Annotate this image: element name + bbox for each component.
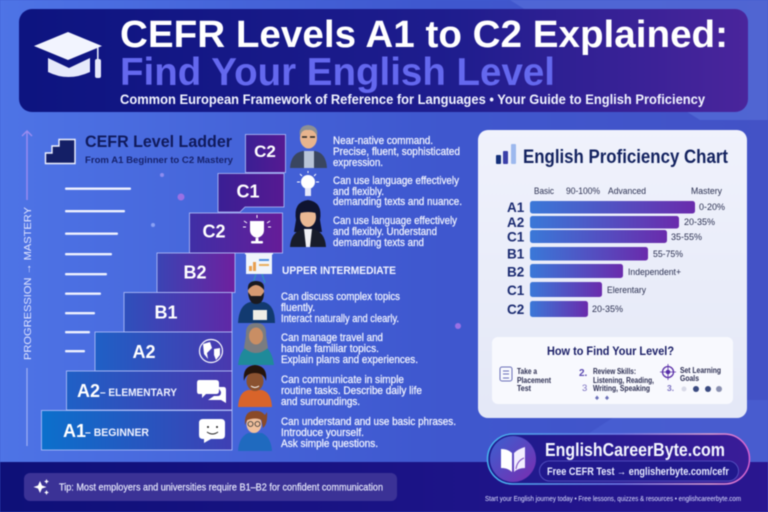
description: B2: fluently. — [281, 302, 315, 314]
ladder heading: CEFR Level Ladder — [85, 132, 232, 151]
icon: globe — [200, 340, 222, 362]
bar chart: C1 — [507, 283, 525, 298]
icon: sparkles — [34, 479, 49, 495]
icon: target — [660, 364, 676, 380]
description: C1: Can use language effectively — [333, 175, 459, 187]
icon: open book with leaf — [490, 436, 536, 482]
description: A2: routine tasks. Describe daily life — [281, 385, 422, 397]
callout: tip: Tip: Most employers and universities require B1–B2 for confident communication — [59, 482, 383, 494]
description: A1: Can understand and use basic phrases. — [281, 416, 456, 428]
title: CEFR Levels A1 to C2 Explained: — [120, 14, 728, 56]
icon: bar chart — [496, 144, 516, 164]
description: C2 second: and flexibly. Understand — [333, 226, 437, 238]
description: A1: Ask simple questions. — [281, 438, 378, 450]
step: B1 — [124, 292, 232, 332]
step: A2: A2 — [132, 342, 156, 362]
tagline: Common European Framework of Reference for Languages • Your Guide to English Proficiency — [120, 92, 705, 107]
bar chart: 35-55% — [671, 232, 703, 243]
description: C2: expression. — [333, 157, 383, 169]
description: C2 — [333, 135, 460, 169]
step 3 text: 3. — [667, 383, 674, 393]
step 2 text: Review Skills: — [593, 367, 636, 376]
progression axis — [22, 131, 34, 446]
icon: presentation board — [245, 253, 273, 283]
description: A2: and surroundings. — [281, 396, 360, 408]
step: A1 beginner — [42, 410, 232, 450]
step: C2 top — [246, 134, 286, 172]
description: C1: demanding texts and nuance. — [333, 196, 462, 208]
step: B1: B1 — [154, 302, 178, 322]
step: A2 elementary — [66, 371, 232, 410]
step 1 text: Take a — [517, 367, 537, 376]
step 2 text — [579, 367, 654, 400]
subtitle heading: Find Your English Level — [120, 51, 555, 94]
avatar: bearded man — [238, 281, 275, 323]
ladder heading: From A1 Beginner to C2 Mastery — [85, 155, 234, 166]
step: C2 — [190, 213, 282, 253]
bar chart: A1 — [507, 200, 525, 215]
step 1 text: Placement — [517, 376, 551, 385]
step: A2 elementary: – ELEMENTARY — [100, 387, 178, 399]
avatar: woman in hijab — [238, 323, 274, 365]
panel: proficiency chart — [478, 130, 747, 418]
bar chart: B1 — [507, 246, 525, 262]
description: B1: Can manage travel and — [281, 332, 383, 344]
bar chart: C1 — [507, 230, 525, 244]
description: C2 second — [333, 215, 457, 249]
description: C2: Precise, fluent, sophisticated — [333, 146, 460, 158]
icon: checklist — [500, 367, 512, 381]
step: A1 beginner: A1 — [63, 421, 86, 441]
header banner — [19, 9, 748, 112]
avatar: senior man — [290, 125, 327, 168]
icon: trophy — [243, 215, 271, 244]
progression axis: PROGRESSION → MASTERY — [22, 207, 34, 360]
description: B2: Can discuss complex topics — [281, 291, 400, 303]
step 2 text: 3 — [582, 383, 587, 394]
step 3 text: Goals — [680, 374, 699, 383]
step: C2: C2 — [202, 222, 226, 242]
chart scale labels: 90-100% — [566, 186, 600, 196]
test link pill — [540, 461, 738, 481]
step 1 text: Test — [517, 384, 531, 393]
step: C1 — [218, 174, 284, 212]
description: B1: Explain plans and experiences. — [281, 354, 418, 366]
description: C1 — [333, 175, 462, 208]
description: C2 second: Can use language effectively — [333, 215, 457, 227]
icon: lightbulb — [297, 171, 319, 196]
callout: tip — [24, 473, 397, 501]
card: how to find your level — [492, 337, 733, 404]
step 1 text — [517, 367, 551, 393]
bar chart: 20-35% — [592, 304, 624, 315]
avatar: curly haired man — [238, 365, 272, 407]
description: A2: Can communicate in simple — [281, 374, 404, 386]
bar chart: C2 — [507, 302, 524, 317]
website name: EnglishCareerByte.com — [545, 440, 725, 460]
step 3 text: Set Learning — [680, 366, 721, 375]
ladder steps — [42, 134, 286, 450]
step 2 text: Listening, Reading, — [593, 376, 654, 385]
bar chart: B2 — [507, 264, 524, 280]
step: B2: B2 — [183, 262, 207, 282]
bar chart — [507, 200, 726, 317]
description: C2: Near-native command. — [333, 135, 433, 147]
avatar: woman in suit — [290, 200, 326, 247]
call to action badge — [488, 434, 750, 484]
step: A1 beginner: – BEGINNER — [85, 427, 149, 439]
icon: graduation cap — [34, 32, 102, 78]
description: C2 second: demanding texts and — [333, 237, 424, 249]
chart scale labels: Mastery — [691, 186, 722, 196]
description: C1: and flexibly. — [333, 186, 384, 198]
bar chart: A2 — [507, 215, 524, 230]
level heading: upper intermediate: UPPER INTERMEDIATE — [282, 265, 396, 277]
icon: smile bubble — [199, 419, 225, 443]
description: B2 — [281, 291, 400, 325]
step: C2 top: C2 — [254, 142, 276, 161]
bar chart: 55-75% — [653, 249, 684, 260]
step 2 text: Writing, Speaking — [593, 384, 650, 393]
description: B2: Interact naturally and clearly. — [281, 313, 399, 325]
test link pill: Free CEFR Test → englisherbyte.com/cefr — [547, 466, 730, 478]
step: C1: C1 — [236, 182, 260, 202]
description: A1 — [281, 416, 456, 450]
decorative dots and lines — [65, 173, 461, 352]
chart scale labels: Basic — [534, 186, 554, 196]
description: B1: handle familiar topics. — [281, 343, 379, 355]
level descriptions — [281, 135, 462, 450]
avatar: girl with glasses — [238, 411, 272, 451]
icon: stairs — [46, 140, 75, 164]
step: B2 — [157, 253, 235, 292]
step: A2 — [95, 332, 232, 371]
description: A1: Introduce yourself. — [281, 427, 364, 439]
bar chart: 0-20% — [699, 202, 726, 213]
chart scale labels: Advanced — [608, 186, 646, 196]
chart scale labels — [534, 186, 722, 196]
step: A2 elementary: A2 — [77, 381, 100, 401]
card: how to find your level: How to Find Your Level? — [547, 346, 674, 358]
chart title: English Proficiency Chart — [523, 147, 729, 168]
description: A2 — [281, 374, 422, 408]
bar chart: Elerentary — [607, 285, 646, 296]
bar chart: Independent+ — [628, 267, 681, 278]
icon: chat bubbles — [197, 380, 226, 403]
description: B1 — [281, 332, 418, 366]
step 3 text — [667, 366, 722, 393]
step 2 text: 2. — [579, 368, 588, 379]
bar chart: 20-35% — [684, 217, 716, 228]
ladder heading — [46, 132, 234, 166]
